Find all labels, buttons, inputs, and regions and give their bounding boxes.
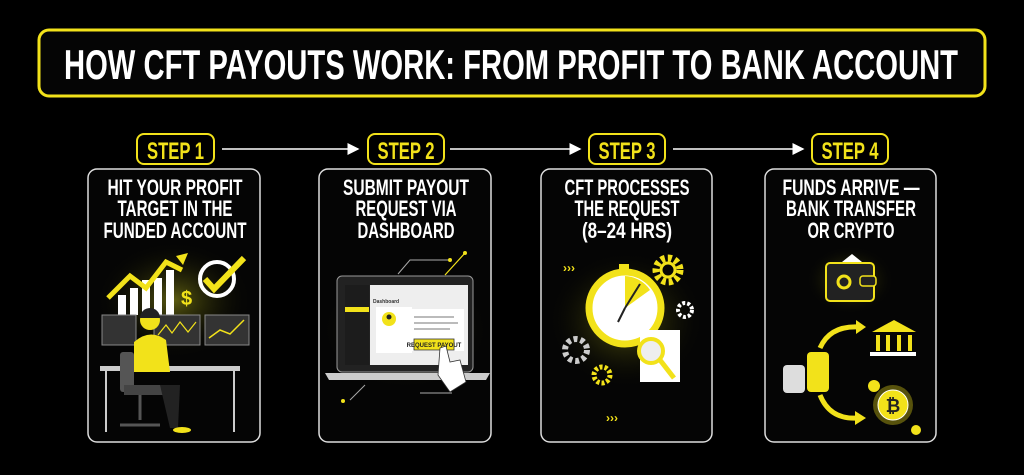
heading: step 3: CFT PROCESSES: [564, 175, 690, 200]
panel: step 1: [88, 169, 260, 442]
heading: step 3: [564, 175, 690, 243]
heading: step 2: DASHBOARD: [358, 218, 454, 243]
heading: step 1: TARGET IN THE: [118, 196, 232, 221]
illustration: wallet, bank, crypto: ₿: [886, 396, 900, 416]
step 3 pill: STEP 3: [598, 138, 656, 165]
panel: step 3: [541, 169, 712, 442]
step 3 pill: [589, 134, 665, 165]
illustration: stopwatch and gears: ›››: [563, 261, 575, 275]
step 2 pill: STEP 2: [378, 138, 434, 165]
step 1 pill: [137, 134, 214, 165]
heading: step 4: FUNDS ARRIVE —: [782, 175, 920, 200]
illustration: laptop dashboard: Dashboard: [373, 299, 399, 305]
heading: step 1: FUNDED ACCOUNT: [104, 218, 247, 243]
title: [39, 30, 985, 96]
illustration: wallet, bank, crypto: [783, 245, 921, 435]
heading: step 2: [343, 175, 469, 243]
arrow: step 1 to 2: [222, 148, 358, 150]
heading: step 1: HIT YOUR PROFIT: [108, 175, 243, 200]
step 4 pill: STEP 4: [822, 138, 879, 165]
illustration: laptop dashboard: REQUEST PAYOUT: [407, 343, 462, 349]
heading: step 4: BANK TRANSFER: [786, 196, 916, 221]
arrow: step 2 to 3: [450, 148, 580, 150]
heading: step 3: THE REQUEST: [574, 196, 680, 221]
step 1 pill: STEP 1: [147, 138, 204, 165]
step 2 pill: [368, 134, 444, 165]
illustration: stopwatch and gears: ›››: [606, 411, 618, 425]
panel: step 4: [765, 169, 936, 442]
arrow: step 3 to 4: [673, 148, 803, 150]
heading: step 4: OR CRYPTO: [808, 218, 894, 243]
illustration: laptop dashboard: [320, 251, 490, 403]
illustration: trader at desk: [94, 240, 254, 433]
heading: step 1: [104, 175, 247, 243]
panel: step 2: [319, 169, 491, 442]
heading: step 2: REQUEST VIA: [356, 196, 457, 221]
heading: step 3: (8–24 HRS): [582, 218, 672, 243]
illustration: trader at desk: $: [181, 288, 192, 310]
heading: step 4: [782, 175, 920, 243]
step 4 pill: [812, 134, 888, 165]
heading: step 2: SUBMIT PAYOUT: [343, 175, 469, 200]
illustration: stopwatch and gears: [546, 250, 706, 425]
